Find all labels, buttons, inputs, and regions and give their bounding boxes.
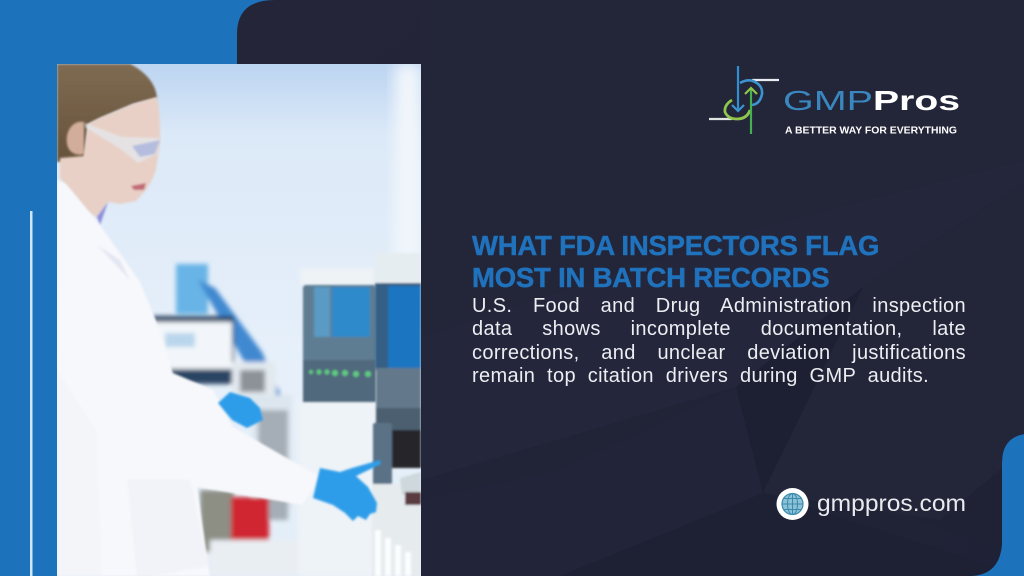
blurred lab equipment in the background [152,264,378,576]
logo wordmark: Pros [873,85,960,116]
body text: data shows incomplete documentation, late [472,318,966,340]
instrument: middle unit [303,285,376,402]
body text [472,295,966,387]
face and neck [60,97,160,218]
body text: U.S. Food and Drug Administration inspection [472,295,966,317]
website label: gmppros.com [817,490,966,516]
lab coat [57,180,320,576]
body text: corrections, and unclear deviation justifications [472,342,966,364]
instrument: front unit [372,253,421,576]
logo wordmark: GMP [783,85,873,116]
photo: lab scientist at instrument [57,64,421,576]
logo mark [709,66,779,134]
panel: dark background [237,0,1024,576]
decorative vertical line [30,211,32,576]
hair [57,64,157,162]
heading [472,230,879,292]
blue gloves [218,392,381,521]
body text: remain top citation drivers during GMP audits. [472,365,929,387]
icon: globe [776,488,808,520]
heading: MOST IN BATCH RECORDS [472,262,829,292]
logo wordmark [783,85,960,136]
safety goggles [85,123,160,163]
heading: WHAT FDA INSPECTORS FLAG [472,230,879,261]
logo wordmark: A BETTER WAY FOR EVERYTHING [785,126,957,136]
